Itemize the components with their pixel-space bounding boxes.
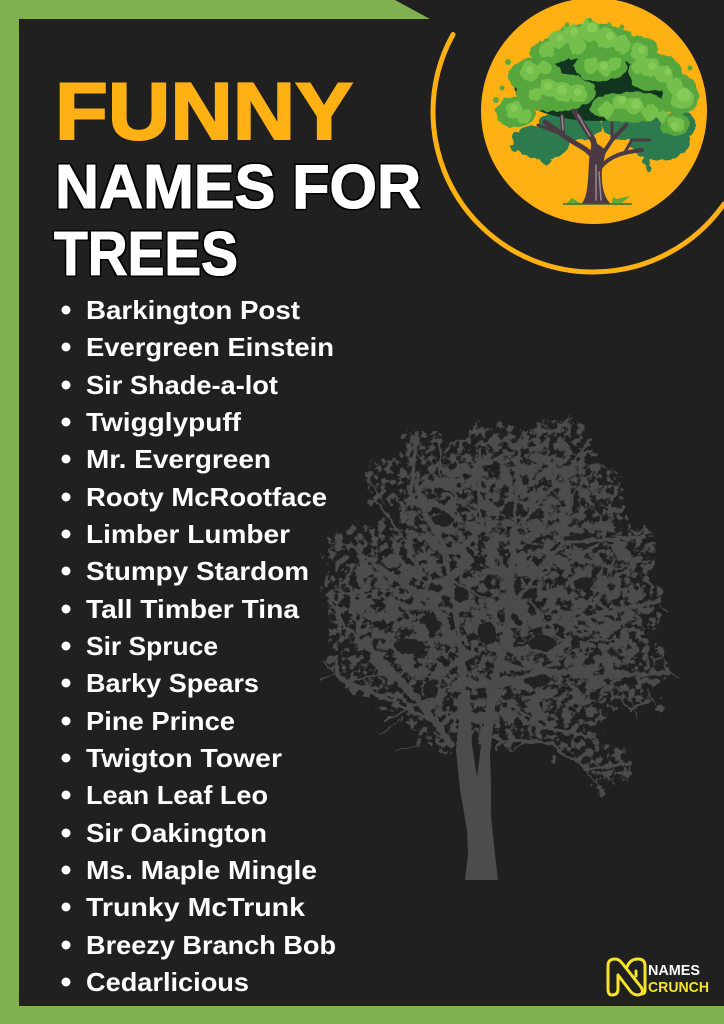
title: names for: NAMES FOR: [55, 153, 421, 222]
list item: Barky Spears: Barky Spears: [86, 668, 259, 698]
tree highlight leaves: [510, 23, 691, 130]
tree lower teal foliage: [511, 109, 696, 171]
tree scattered leaves: [493, 18, 694, 110]
tree foliage base clusters: [496, 23, 698, 136]
list item: Stumpy Stardom: Stumpy Stardom: [86, 556, 309, 586]
decorative orange ring: [433, 34, 724, 272]
list item: Limber Lumber: Limber Lumber: [86, 519, 290, 549]
list item: Breezy Branch Bob: Breezy Branch Bob: [86, 930, 336, 960]
list item: Lean Leaf Leo: Lean Leaf Leo: [86, 780, 268, 810]
list item: Tall Timber Tina: Tall Timber Tina: [86, 594, 300, 624]
tree ground and grass: [563, 196, 632, 204]
list item: Twigton Tower: Twigton Tower: [86, 743, 282, 773]
tree trunk: [456, 690, 498, 880]
list item: Pine Prince: Pine Prince: [86, 706, 235, 736]
logo: names crunch: [608, 959, 709, 996]
tree mid green leaves: [505, 20, 693, 132]
list item: Sir Spruce: Sir Spruce: [86, 631, 218, 661]
logo word crunch: CRUNCH: [648, 979, 709, 996]
list item: Sir Shade-a-lot: Sir Shade-a-lot: [86, 370, 278, 400]
list item: Ms. Maple Mingle: Ms. Maple Mingle: [86, 855, 317, 885]
orange circle: [481, 0, 707, 224]
list item: Cedarlicious: Cedarlicious: [86, 967, 249, 997]
list item: Evergreen Einstein: Evergreen Einstein: [86, 332, 334, 362]
icon: green tree: [493, 18, 698, 204]
list of funny tree names: [62, 295, 336, 997]
list item: Barkington Post: Barkington Post: [86, 295, 300, 325]
title: funny: FUNNY: [55, 67, 353, 157]
tree crown fine lace: [320, 416, 668, 790]
background tree silhouette: [320, 416, 678, 880]
title: trees: TREES: [54, 220, 238, 289]
tree crown dark gaps: [395, 502, 601, 699]
list item: Rooty McRootface: Rooty McRootface: [86, 482, 327, 512]
tree trunk and branches: [538, 110, 650, 204]
list item: Sir Oakington: Sir Oakington: [86, 818, 267, 848]
tree crown inner mass: [350, 432, 640, 725]
list item: Mr. Evergreen: Mr. Evergreen: [86, 444, 271, 474]
tree main branches: [320, 416, 678, 790]
logo N mark: [608, 959, 645, 995]
list item: Twigglypuff: Twigglypuff: [86, 407, 241, 437]
tree dark canopy: [514, 49, 678, 121]
logo word names: NAMES: [648, 962, 700, 979]
list item: Trunky McTrunk: Trunky McTrunk: [86, 892, 306, 922]
